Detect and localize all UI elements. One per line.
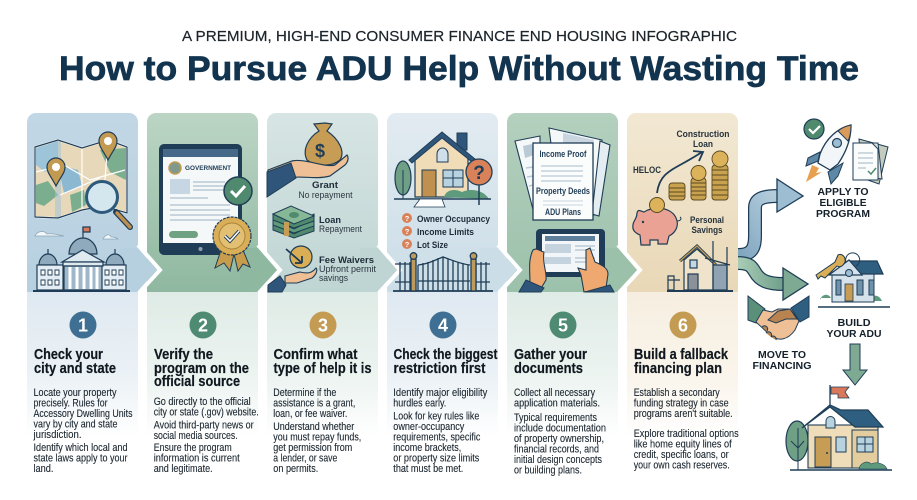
text: step 4 body: owner-occupancy — [393, 421, 465, 433]
text: step 5 body: initial design concepts — [514, 454, 602, 466]
text: step 6 body: credit, specific loans, or — [634, 449, 729, 461]
text: step 5 body: include documentation — [514, 422, 606, 434]
panel: step 3 background — [267, 113, 400, 437]
text: step 6 body: programs aren't suitable. — [634, 408, 733, 420]
panel: step 6 background — [627, 113, 738, 437]
list: restriction items — [402, 213, 491, 251]
icon: step number 5: 5 — [558, 316, 568, 336]
icon: step number 2: 2 — [198, 316, 208, 336]
subtitle: A PREMIUM, HIGH-END CONSUMER FINANCE END HOUSING INFOGRAPHIC — [182, 28, 737, 45]
text: step 1 body: Accessory Dwelling Units — [34, 408, 133, 420]
icon: rising arrow — [657, 151, 703, 193]
text: step 6 body: funding strategy in case — [634, 398, 729, 410]
text: step 5 body — [514, 387, 606, 476]
text: step 2 body: Avoid third-party news or — [154, 420, 254, 432]
icon: application documents — [853, 139, 888, 184]
icon: step number 3: 3 — [318, 316, 328, 336]
heading: step 6: financing plan — [634, 361, 722, 377]
icon: coin stacks — [669, 151, 728, 200]
text: move to financing label: MOVE TO — [758, 349, 806, 361]
text: personal savings label: Personal — [690, 215, 724, 226]
text: apply label — [816, 186, 870, 220]
text: loan label: Repayment — [319, 224, 362, 234]
text: step 6 body: like home equity lines of — [634, 438, 732, 450]
text: government label: GOVERNMENT — [185, 165, 231, 172]
text: apply label: ELIGIBLE — [820, 197, 866, 209]
arrow: down to finished home — [843, 344, 867, 385]
text: step 4 body: Identify major eligibility — [393, 387, 488, 399]
text: step 2 body: social media sources. — [154, 430, 238, 442]
text: fee waivers label — [319, 255, 376, 283]
text: step 1 body: state laws apply to your — [34, 452, 128, 464]
text: build your ADU label: YOUR ADU — [826, 328, 882, 340]
icon: government building — [33, 227, 130, 291]
text: step 1 body — [33, 387, 133, 475]
icon: rocket — [804, 119, 851, 184]
text: step 3 body: get permission from — [273, 442, 352, 454]
text: grant label: Grant — [312, 180, 339, 191]
heading: step 5 — [514, 347, 587, 377]
icon: tablet with hands — [519, 229, 614, 292]
text: step 6 body: Establish a secondary — [634, 387, 720, 399]
panel: step 1 background — [27, 113, 160, 437]
text: step 6 body — [634, 387, 739, 472]
arrow: to build your ADU — [738, 263, 808, 300]
text: step 2 body — [154, 396, 259, 475]
text: step 3 body: you must repay funds, — [273, 432, 361, 444]
icon: stacked documents — [515, 128, 610, 220]
icon: money bag in hand: $ — [315, 141, 325, 161]
text: step 3 body: Determine if the — [273, 387, 336, 399]
text: step 3 body — [273, 387, 361, 475]
icon: step number 4: 4 — [438, 316, 448, 336]
icon: map with pins and magnifier — [35, 132, 130, 227]
text: step 2 body: city or state (.gov) website. — [154, 406, 259, 418]
text: apply label: APPLY TO — [818, 186, 868, 198]
text: step 5 body: of property ownership, — [514, 433, 604, 445]
text: step 2 body: Go directly to the official — [154, 396, 251, 408]
icon: house with question mark — [394, 132, 492, 207]
list: restriction items: ? — [405, 227, 410, 236]
text: step 5 body: financial records, and — [514, 444, 599, 456]
list: restriction items: Lot Size — [417, 240, 448, 251]
text: step 5 body: Collect all necessary — [514, 387, 595, 399]
heading: step 4: restriction first — [394, 361, 486, 377]
text: step 1 body: precisely. Rules for — [34, 398, 108, 410]
text: step 1 body: Identify which local and — [34, 442, 128, 454]
heading: step 6: Build a fallback — [634, 347, 729, 363]
text: step 1 body: vary by city and state — [34, 418, 118, 430]
text: step 3 body: Understand whether — [273, 421, 355, 433]
text: step 5 body: Typical requirements — [514, 412, 597, 424]
text: construction loan label — [676, 129, 730, 150]
heading: step 5: documents — [514, 361, 583, 377]
text: move to financing label: FINANCING — [752, 360, 812, 372]
list: restriction items: Owner Occupancy — [417, 214, 491, 225]
text: step 2 body: Ensure the program — [154, 442, 232, 454]
panel: step 4 background — [387, 113, 520, 437]
list: restriction items: ? — [405, 214, 410, 223]
text: fee waivers label: Fee Waivers — [319, 255, 374, 266]
icon: step number 4 — [430, 312, 456, 338]
text: step 1 body: land. — [34, 463, 54, 475]
text: fee waivers label: savings — [319, 273, 348, 283]
text: personal savings label: Savings — [692, 225, 722, 236]
icon: house under construction — [667, 241, 733, 291]
heading: step 3 — [274, 347, 372, 377]
icon: step number 1: 1 — [78, 316, 88, 336]
heading: step 4 — [394, 347, 498, 377]
icon: step number 1 — [70, 312, 96, 338]
text: loan label: Loan — [319, 215, 341, 226]
heading: step 4: Check the biggest — [394, 347, 498, 363]
text: step 1 body: Locate your property — [34, 387, 117, 399]
text: grant label: No repayment — [298, 190, 353, 200]
heading: step 2: Verify the — [154, 347, 213, 363]
text: document labels: ADU Plans — [545, 207, 581, 217]
icon: step number 6 — [670, 312, 696, 338]
text: construction loan label: Loan — [693, 139, 713, 150]
text: HELOC label: HELOC — [633, 165, 661, 176]
icon: money bag in hand — [267, 123, 348, 197]
heading: step 1 — [34, 347, 116, 377]
text: build your ADU label — [826, 317, 882, 340]
icon: step number 3 — [310, 312, 336, 338]
text: step 4 body: Look for key rules like — [393, 410, 479, 422]
heading: step 1: city and state — [34, 361, 116, 377]
text: step 3 body: loan, or fee waiver. — [273, 408, 347, 420]
text: construction loan label: Construction — [676, 129, 730, 140]
text: document labels: Property Deeds — [536, 186, 590, 196]
text: step 4 body — [393, 387, 488, 475]
heading: step 6 — [634, 347, 729, 377]
icon: iron gate — [393, 253, 493, 291]
heading: step 5: Gather your — [514, 347, 587, 363]
panel: step 2 background — [147, 113, 280, 437]
list: restriction items: ? — [405, 240, 410, 249]
text: personal savings label — [690, 215, 724, 236]
text: loan label — [319, 215, 362, 234]
text: step 2 body: information is current — [154, 452, 240, 464]
icon: house with key — [816, 253, 890, 307]
text: step 4 body: or property size limits — [393, 452, 480, 464]
text: document labels: Income Proof — [540, 149, 587, 159]
icon: step number 5 — [550, 312, 576, 338]
text: step 3 body: a lender, or save — [273, 452, 337, 464]
heading: step 3: type of help it is — [274, 361, 372, 377]
text: step 4 body: hurdles early. — [393, 398, 446, 410]
text: grant label — [298, 180, 353, 200]
text: step 2 body: and legitimate. — [154, 463, 213, 475]
text: step 4 body: that must be met. — [393, 463, 463, 475]
icon: piggy bank — [633, 198, 681, 245]
heading: step 3: Confirm what — [274, 347, 358, 363]
text: step 5 body: application materials. — [514, 398, 600, 410]
icon: finished home with flag — [786, 385, 892, 470]
text: move to financing label — [752, 349, 812, 372]
text: build your ADU label: BUILD — [838, 317, 871, 329]
heading: step 2: official source — [154, 374, 240, 390]
panel: step 5 background — [507, 113, 640, 437]
icon: step number 6: 6 — [678, 316, 688, 336]
icon: handshake — [748, 296, 809, 340]
heading: step 2 — [154, 347, 249, 390]
list: restriction items: Income Limits — [417, 227, 474, 238]
text: document labels — [536, 149, 590, 217]
text: step 6 body: your own cash reserves. — [634, 460, 730, 472]
title: How to Pursue ADU Help Without Wasting Time — [59, 50, 859, 88]
text: step 4 body: income brackets, — [393, 442, 461, 454]
icon: house with question mark: ? — [473, 163, 485, 184]
icon: fee waiver coin and hand — [268, 246, 317, 292]
text: step 1 body: jurisdiction. — [33, 429, 82, 441]
text: step 6 body: Explore traditional options — [634, 428, 739, 440]
text: fee waivers label: Upfront permit — [319, 264, 376, 274]
icon: step number 2 — [190, 312, 216, 338]
text: step 3 body: assistance is a grant, — [273, 398, 355, 410]
arrow: to eligible program — [738, 179, 803, 255]
text: step 3 body: on permits. — [273, 463, 318, 475]
icon: verified government tablet — [159, 144, 252, 271]
text: step 5 body: or building plans. — [514, 464, 582, 476]
heading: step 2: program on the — [154, 361, 249, 377]
heading: step 1: Check your — [34, 347, 103, 363]
icon: cash stack — [273, 206, 314, 238]
text: apply label: PROGRAM — [816, 208, 870, 220]
text: step 4 body: requirements, specific — [393, 432, 481, 444]
